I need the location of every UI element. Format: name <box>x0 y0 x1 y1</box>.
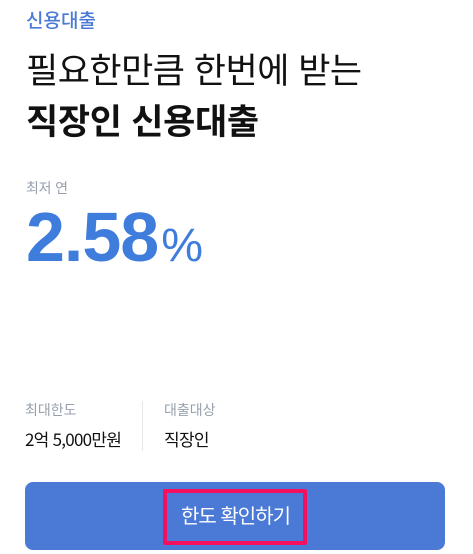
title line 1: 필요한만큼 한번에 받는 <box>26 43 362 94</box>
stat value: max limit: 2억 5,000만원 <box>25 426 121 451</box>
category label: 신용대출 <box>26 6 96 33</box>
stat label: loan target: 대출대상 <box>164 400 216 420</box>
stat: loan target <box>164 400 216 451</box>
divider <box>142 401 143 451</box>
rate caption: 최저 연 <box>26 178 68 198</box>
stat: max limit <box>25 400 121 451</box>
stat value: loan target: 직장인 <box>164 426 209 451</box>
title line 2: 직장인 신용대출 <box>26 94 259 145</box>
rate value: 2.58% <box>26 198 202 276</box>
button <box>25 482 445 550</box>
highlight box <box>163 489 307 545</box>
stat label: max limit: 최대한도 <box>25 400 77 420</box>
button label: 한도 확인하기 <box>181 500 290 529</box>
